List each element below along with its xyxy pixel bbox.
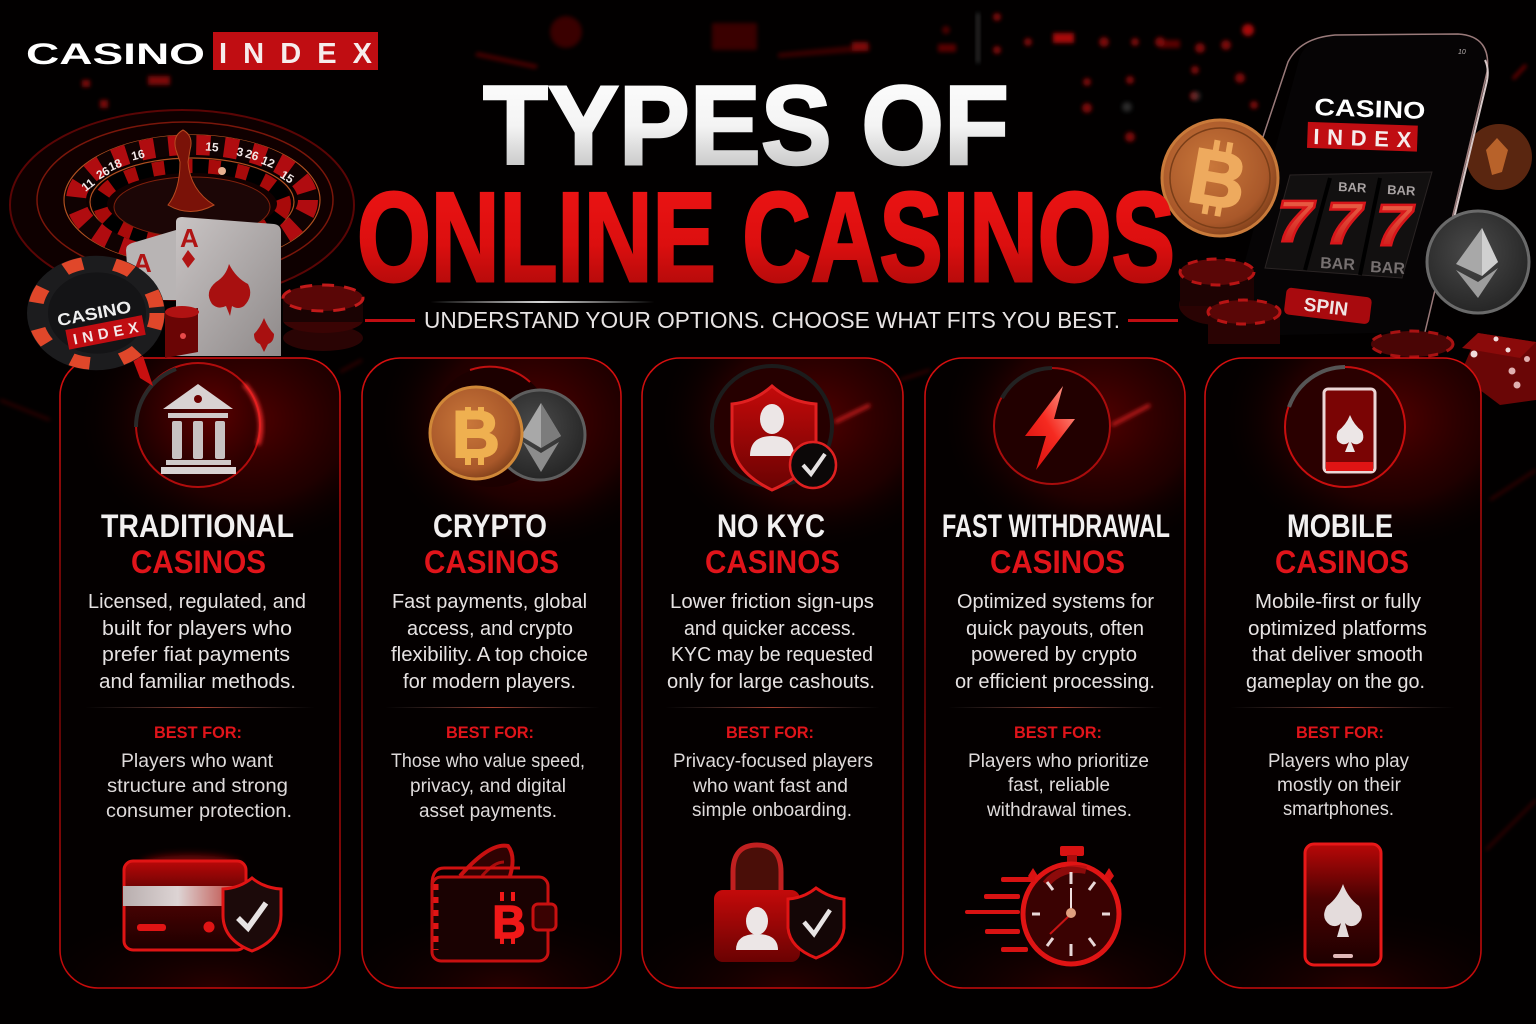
casino chip: CASINO <box>56 297 133 330</box>
description: gameplay on the go. <box>1246 671 1425 693</box>
best for: privacy, and digital <box>410 775 566 797</box>
heading: CASINOS <box>424 544 559 580</box>
slot reels: 7 <box>1376 193 1415 258</box>
smartphone: CASINO <box>1314 94 1426 125</box>
heading: CRYPTO <box>433 508 547 544</box>
description <box>88 591 306 693</box>
illustration: roulette, cards and chips <box>10 110 363 386</box>
best for: Those who value speed, <box>391 750 585 772</box>
heading <box>1275 508 1409 580</box>
best for: BEST FOR: <box>446 723 534 742</box>
icon: bitcoin wallet: B <box>492 896 526 948</box>
description: flexibility. A top choice <box>391 644 588 666</box>
icon: bitcoin and ethereum coins: B <box>452 397 500 471</box>
icon: lightning bolt <box>994 368 1150 484</box>
panel: no kyc casinos <box>642 358 903 988</box>
wheel numbers: 26 <box>94 163 113 182</box>
description: powered by crypto <box>971 644 1137 666</box>
description: Licensed, regulated, and <box>88 591 306 613</box>
best for: simple onboarding. <box>692 799 852 821</box>
wheel numbers: 16 <box>130 147 146 163</box>
description <box>955 591 1155 693</box>
wheel numbers: 15 <box>278 168 297 187</box>
heading: CASINOS <box>990 544 1125 580</box>
smartphone <box>1240 34 1488 335</box>
spin button: SPIN <box>1303 295 1349 321</box>
title <box>357 63 1175 308</box>
slot reels: 7 <box>1277 189 1316 254</box>
description <box>1246 591 1427 693</box>
description: or efficient processing. <box>955 671 1155 693</box>
playing cards: A <box>133 248 152 278</box>
best for <box>968 723 1149 821</box>
best for <box>391 723 585 822</box>
illustration: phone, coins, chips and dice <box>1162 34 1536 405</box>
best for: BEST FOR: <box>1014 723 1102 742</box>
best for: Players who play <box>1268 750 1409 772</box>
wheel numbers: 15 <box>205 139 220 155</box>
smartphone: 10 <box>1458 49 1466 56</box>
icon: bitcoin wallet <box>432 846 556 961</box>
ethereum coin <box>1427 211 1529 313</box>
description: only for large cashouts. <box>667 671 875 693</box>
description: Fast payments, global <box>392 591 587 613</box>
smartphone: INDEX <box>1313 124 1412 152</box>
red chips <box>1179 259 1453 357</box>
description <box>391 591 588 693</box>
heading: CASINOS <box>131 544 266 580</box>
best for <box>1268 723 1409 820</box>
casino chip: INDEX <box>72 319 140 349</box>
wheel numbers: 26 <box>244 146 261 164</box>
heading <box>424 508 559 580</box>
logo: Casino Index: CASINO <box>26 38 205 71</box>
best for: asset payments. <box>419 800 557 822</box>
best for: who want fast and <box>692 775 848 797</box>
description: optimized platforms <box>1248 618 1427 640</box>
subtitle: UNDERSTAND YOUR OPTIONS. CHOOSE WHAT FITS YOU BEST. <box>424 307 1120 333</box>
heading <box>101 508 294 580</box>
description: built for players who <box>102 618 292 640</box>
best for: BEST FOR: <box>726 723 814 742</box>
slot reels: BAR <box>1370 259 1406 278</box>
best for: Players who want <box>121 750 274 772</box>
description: KYC may be requested <box>671 644 873 666</box>
panel: fast withdrawal casinos <box>925 358 1185 988</box>
icon: credit card with shield <box>123 855 281 951</box>
logo: Casino Index <box>26 32 378 71</box>
best for: Privacy-focused players <box>673 750 873 772</box>
description: for modern players. <box>403 671 576 693</box>
panel: mobile casinos <box>1205 358 1481 988</box>
description: and familiar methods. <box>99 671 296 693</box>
heading: FAST WITHDRAWAL <box>942 508 1170 544</box>
best for <box>673 723 873 821</box>
bitcoin coin <box>1162 120 1278 236</box>
description: that deliver smooth <box>1252 644 1423 666</box>
wheel numbers <box>79 139 297 194</box>
logo: Casino Index: INDEX <box>219 38 373 70</box>
best for <box>106 723 292 822</box>
slot reels: BAR <box>1320 255 1356 274</box>
icon: user shield with check <box>712 366 870 490</box>
wheel numbers: 18 <box>106 156 124 174</box>
red die <box>1460 333 1536 405</box>
heading: NO KYC <box>717 508 825 544</box>
casino chip <box>27 256 165 370</box>
wheel numbers: 3 <box>235 144 245 160</box>
best for: BEST FOR: <box>1296 723 1384 742</box>
best for: mostly on their <box>1277 774 1401 796</box>
icon: bitcoin and ethereum coins <box>430 367 585 487</box>
playing cards <box>126 217 281 356</box>
description: Lower friction sign-ups <box>670 591 874 613</box>
icon: smartphone with spade <box>1305 844 1381 965</box>
best for: smartphones. <box>1283 798 1394 820</box>
title: ONLINE CASINOS <box>357 166 1175 308</box>
red chip edge <box>133 356 153 386</box>
description: access, and crypto <box>407 618 573 640</box>
icon: padlock with shield <box>714 845 844 962</box>
best for: BEST FOR: <box>154 723 242 742</box>
red die <box>165 306 199 358</box>
roulette wheel <box>10 110 354 300</box>
best for: consumer protection. <box>106 800 292 822</box>
description: quick payouts, often <box>966 618 1144 640</box>
description: and quicker access. <box>684 618 856 640</box>
description: Mobile-first or fully <box>1255 591 1421 613</box>
spin button <box>1284 287 1372 325</box>
heading: MOBILE <box>1287 508 1393 544</box>
chip stack <box>283 285 363 351</box>
slot reels: 7 <box>1326 191 1365 256</box>
description <box>667 591 875 693</box>
title: TYPES OF <box>483 63 1009 188</box>
best for: structure and strong <box>107 775 288 797</box>
panel: traditional casinos <box>60 358 340 988</box>
heading: TRADITIONAL <box>101 508 294 544</box>
heading <box>942 508 1170 580</box>
heading: CASINOS <box>705 544 840 580</box>
description: prefer fiat payments <box>102 644 290 666</box>
slot reels: BAR <box>1338 179 1367 196</box>
heading: CASINOS <box>1275 544 1409 580</box>
slot reels: BAR <box>1387 182 1416 199</box>
best for: Players who prioritize <box>968 750 1149 772</box>
slot reels <box>1277 179 1416 278</box>
best for: withdrawal times. <box>986 799 1132 821</box>
wheel numbers: 12 <box>259 153 277 171</box>
bitcoin coin: B <box>1182 131 1253 227</box>
best for: fast, reliable <box>1008 774 1110 796</box>
heading <box>705 508 840 580</box>
wheel numbers: 11 <box>79 175 98 194</box>
side coin <box>1466 124 1532 190</box>
icon: phone with spade <box>1285 367 1405 487</box>
panel: crypto casinos <box>362 358 621 988</box>
icon: stopwatch <box>965 846 1119 964</box>
description: Optimized systems for <box>957 591 1154 613</box>
icon: bank <box>136 363 261 487</box>
playing cards: A <box>180 223 199 253</box>
